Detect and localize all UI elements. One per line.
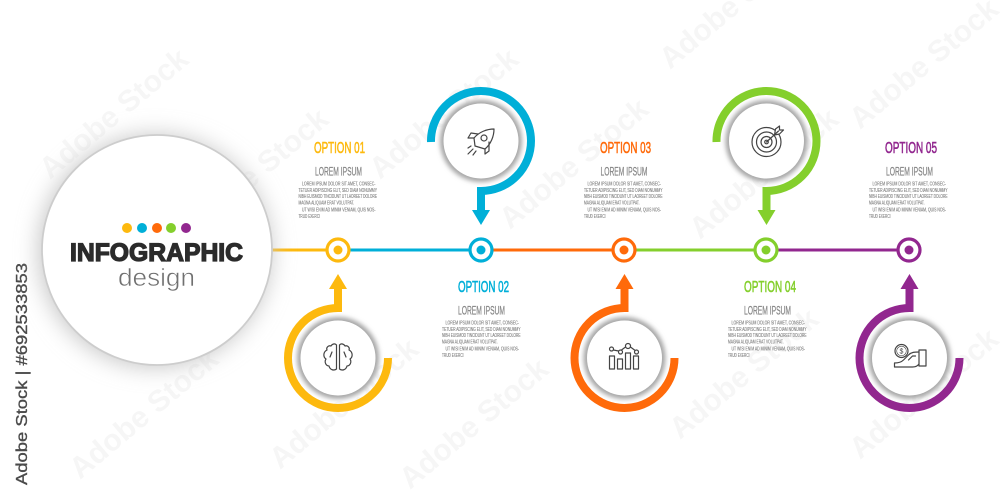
panel: option 02 text: LOREM IPSUM (458, 304, 505, 318)
panel: option 03 text: TETUER ADIPISCING ELIT, SED DIAM NONUMMY (584, 188, 663, 194)
stock credit text: Adobe Stock | #692533853 (14, 263, 31, 485)
panel: option 04 text: LOREM IPSUM (744, 304, 791, 318)
icon: rocket (468, 129, 494, 155)
panel: option 02 text: OPTION 02 (458, 279, 509, 296)
panel: option 01 text: TRUD EXERCI (298, 214, 320, 220)
disc (584, 317, 666, 399)
panel: option 02 text: UT WISI ENIM AD MINIM VENIAM, QUIS NOS- (446, 346, 519, 352)
disc (297, 317, 379, 399)
panel: option 03 text: TRUD EXERCI (584, 214, 606, 220)
panel: option 04 text: UT WISI ENIM AD MINIM VENIAM, QUIS NOS- (732, 346, 805, 352)
watermark pattern: Adobe Stock (683, 102, 845, 245)
panel: option 01 text: LOREM IPSUM (315, 164, 362, 178)
panel: option 01 text: MAGNA ALIQUAM ERAT VOLUTPAT. (298, 201, 354, 207)
panel: option 03 text: LOREM IPSUM (600, 164, 648, 178)
watermark pattern: Adobe Stock (63, 342, 225, 485)
title circle (38, 134, 272, 368)
timeline node 3 (613, 239, 635, 261)
panel: option 04 text: NIBH EUISMOD TINCIDUNT UT LAOREET DOLORE (728, 333, 807, 339)
panel: option 02 text: MAGNA ALIQUAM ERAT VOLUTPAT. (442, 340, 498, 346)
arc arrow (288, 274, 388, 408)
panel: option 03 text: LOREM IPSUM DOLOR SIT AMET, CONSEC- (588, 182, 661, 188)
panel: option 02 text (442, 279, 521, 359)
panel: option 04 text: TETUER ADIPISCING ELIT, SED DIAM NONUMMY (728, 327, 807, 333)
timeline line (272, 248, 909, 252)
panel: option 05 text: LOREM IPSUM DOLOR SIT AMET, CONSEC- (872, 182, 946, 188)
panel: option 02 text: TRUD EXERCI (442, 353, 464, 359)
watermark pattern: Adobe Stock (173, 102, 335, 245)
panel: option 04 text: MAGNA ALIQUAM ERAT VOLUTPAT. (728, 340, 784, 346)
timeline node 2 (470, 239, 492, 261)
panel: option 01 text: OPTION 01 (314, 140, 365, 157)
timeline node 5 (898, 239, 920, 261)
watermark pattern: Adobe Stock (393, 352, 555, 495)
colour dots (122, 223, 191, 233)
arc arrow (716, 91, 816, 225)
panel: option 02 text: TETUER ADIPISCING ELIT, SED DIAM NONUMMY (442, 327, 521, 333)
panel: option 05 text: UT WISI ENIM AD MINIM VENIAM, QUIS NOS- (872, 207, 946, 213)
watermark pattern: Adobe Stock (663, 302, 825, 445)
panel: option 03 text (584, 140, 663, 220)
arc arrow (574, 274, 674, 408)
panel: option 05 text (869, 140, 948, 220)
panel: option 04 text: TRUD EXERCI (728, 353, 750, 359)
panel: option 04 text: OPTION 04 (744, 279, 796, 296)
timeline node 4 (755, 239, 777, 261)
panel: option 02 text: NIBH EUISMOD TINCIDUNT UT LAOREET DOLORE (442, 333, 521, 339)
watermark pattern: Adobe Stock (363, 42, 525, 185)
icon: bar chart (610, 344, 638, 369)
panel: option 04 text (728, 279, 807, 359)
panel: option 03 text: OPTION 03 (600, 140, 651, 157)
panel: option 05 text: TETUER ADIPISCING ELIT, SED DIAM NONUMMY (869, 188, 948, 194)
panel: option 02 text: LOREM IPSUM DOLOR SIT AMET, CONSEC- (446, 320, 519, 326)
subtitle text: design (118, 264, 195, 292)
panel: option 05 text: MAGNA ALIQUAM ERAT VOLUTPAT. (869, 201, 925, 207)
watermark pattern: Adobe Stock (33, 42, 195, 185)
disc (440, 100, 522, 182)
panel: option 05 text: LOREM IPSUM (886, 164, 933, 178)
panel: option 03 text: NIBH EUISMOD TINCIDUNT UT LAOREET DOLORE (584, 194, 663, 200)
panel: option 05 text: NIBH EUISMOD TINCIDUNT UT LAOREET DOLORE (869, 194, 948, 200)
disc (868, 317, 950, 399)
disc (726, 100, 808, 182)
watermark pattern: Adobe Stock (263, 332, 425, 475)
panel: option 01 text (298, 140, 377, 220)
panel: option 01 text: NIBH EUISMOD TINCIDUNT UT LAOREET DOLORE (298, 194, 377, 200)
icon: brain (324, 344, 352, 370)
panel: option 01 text: UT WISI ENIM AD MINIM VENIAM, QUIS NOS- (302, 207, 376, 213)
arc arrow (860, 274, 960, 408)
badge 4: green ring with down arrow and target icon (716, 91, 816, 225)
panel: option 01 text: TETUER ADIPISCING ELIT, SED DIAM NONUMMY (298, 188, 377, 194)
icon: target (752, 126, 784, 156)
icon: hand with coin: $ (900, 348, 904, 356)
badge 1: yellow ring with up arrow and brain icon (288, 274, 388, 408)
badge 3: orange ring with up arrow and chart icon (574, 274, 674, 408)
badge 5: purple ring with up arrow and money hand icon (860, 274, 960, 408)
title text: INFOGRAPHIC (70, 239, 243, 267)
panel: option 03 text: MAGNA ALIQUAM ERAT VOLUTPAT. (584, 201, 640, 207)
arc arrow (431, 91, 531, 225)
panel: option 05 text: TRUD EXERCI (869, 214, 891, 220)
panel: option 04 text: LOREM IPSUM DOLOR SIT AMET, CONSEC- (732, 320, 805, 326)
panel: option 01 text: LOREM IPSUM DOLOR SIT AMET, CONSEC- (302, 182, 376, 188)
badge 2: blue ring with down arrow and rocket icon (431, 91, 531, 225)
panel: option 05 text: OPTION 05 (885, 140, 937, 157)
timeline node 1 (327, 239, 349, 261)
panel: option 03 text: UT WISI ENIM AD MINIM VENIAM, QUIS NOS- (588, 207, 661, 213)
watermark pattern: Adobe Stock (493, 92, 655, 235)
